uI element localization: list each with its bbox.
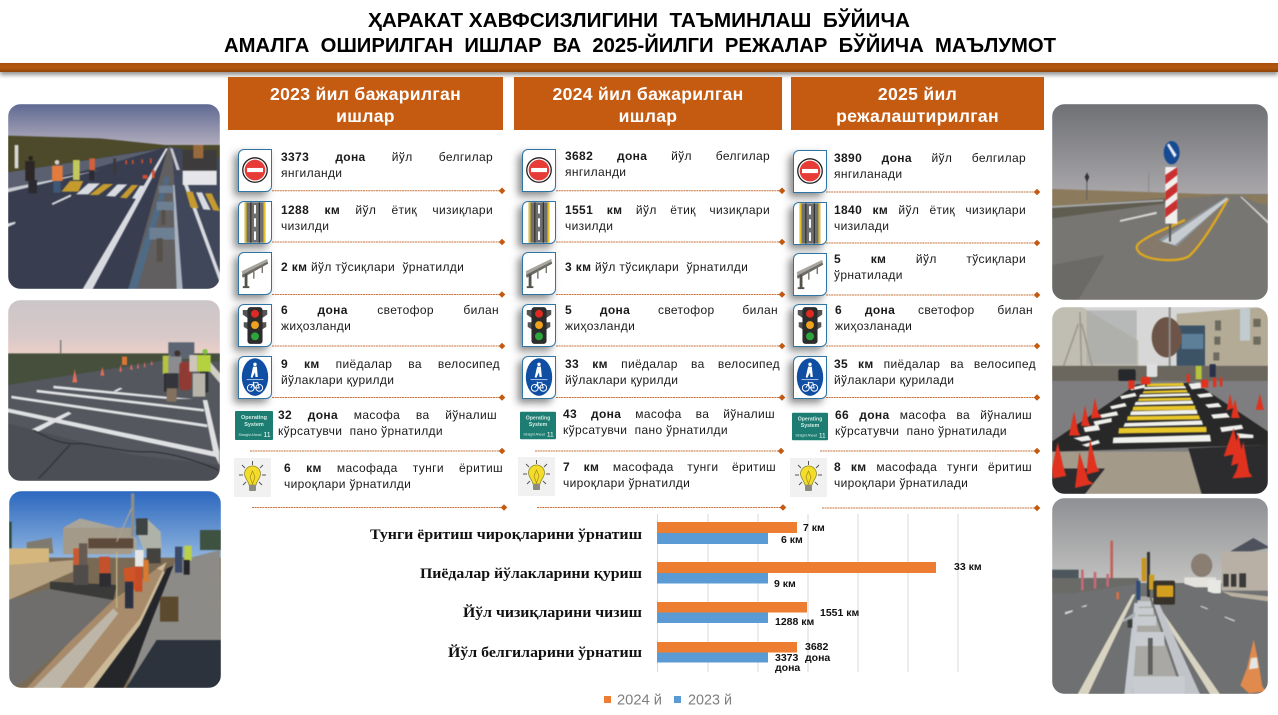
- text: lighting 2025: [834, 460, 1032, 490]
- text: paths 2023: 9 км пиёдалар ва велосипед: [281, 357, 500, 371]
- bar chart: 2023 vs 2024: 33 км: [954, 561, 982, 573]
- icon: pedestrian sign 2023: [238, 356, 272, 399]
- icon: direction board 2025: Operating: [798, 416, 822, 422]
- text: boards 2025: [835, 408, 1032, 438]
- icon: lamp 2025: [790, 458, 827, 497]
- text: traffic lights 2024: 5 дона светофор билан: [565, 303, 778, 317]
- photo: median barrier and sign: [1052, 104, 1268, 300]
- icon: guardrail 2024: [522, 252, 556, 295]
- text: lines 2024: чизилди: [565, 218, 613, 232]
- bar chart: 2023 vs 2024: дона: [775, 662, 800, 674]
- icon: direction board 2025: System: [801, 423, 820, 429]
- icon: direction board 2023: 11: [263, 432, 271, 439]
- icon: road lines 2023: [238, 201, 272, 244]
- text: lines 2023: 1288 км йўл ётиқ чизиқлари: [281, 203, 493, 217]
- text: boards 2023: [278, 408, 497, 438]
- heading: 2024: ишлар: [619, 106, 677, 126]
- chart legend: 2024 й: [617, 692, 662, 708]
- text: lighting 2023: чироқлари ўрнатилди: [284, 476, 411, 490]
- heading: 2025: режалаштирилган: [836, 106, 999, 126]
- text: lines 2024: [565, 203, 770, 232]
- text: barriers 2023: 2 км йўл тўсиқлари ўрнатилди: [281, 260, 464, 274]
- icon: direction board 2024: 11: [547, 431, 554, 438]
- text: signs 2023: [281, 150, 493, 180]
- bar chart: 2023 vs 2024: Йўл чизиқларини чизиш: [463, 604, 642, 621]
- icon: road lines 2025: [793, 202, 827, 245]
- icon: traffic light 2024: [522, 304, 556, 347]
- icon: no entry sign 2024: [522, 149, 556, 192]
- text: signs 2023: 3373 дона йўл белгилар: [281, 150, 493, 164]
- chart legend: 2023 й: [688, 692, 732, 708]
- icon: no entry sign 2023: [238, 149, 272, 192]
- text: paths 2025: 35 км пиёдалар ва велосипед: [834, 357, 1036, 371]
- text: barriers 2025: [834, 252, 1026, 282]
- text: boards 2025: кўрсатувчи пано ўрнатилади: [835, 424, 1007, 438]
- title: [224, 8, 1056, 57]
- text: paths 2025: [834, 357, 1036, 386]
- text: lighting 2023: 6 км масофада тунги ёритиш: [284, 461, 503, 475]
- text: traffic lights 2023: [281, 303, 499, 332]
- text: lighting 2023: [284, 461, 503, 490]
- text: traffic lights 2025: 6 дона светофор билан: [835, 303, 1033, 317]
- heading: 2023: [228, 77, 503, 130]
- text: paths 2024: 33 км пиёдалар ва велосипед: [565, 357, 780, 371]
- heading: 2025: 2025 йил: [878, 84, 957, 104]
- text: signs 2025: янгиланади: [834, 166, 902, 180]
- icon: direction board 2023: Straight Ahead: [239, 433, 262, 437]
- icon: direction board 2025: 11: [819, 432, 826, 439]
- text: traffic lights 2024: жиҳозланди: [565, 318, 635, 332]
- text: lines 2024: 1551 км йўл ётиқ чизиқлари: [565, 203, 770, 217]
- text: traffic lights 2023: жиҳозланди: [281, 318, 351, 332]
- text: traffic lights 2023: 6 дона светофор билан: [281, 303, 499, 317]
- text: lighting 2025: чироқлари ўрнатилади: [834, 476, 968, 490]
- photo: concrete works: [9, 491, 221, 688]
- text: paths 2023: [281, 357, 500, 386]
- icon: traffic light 2023: [238, 304, 272, 347]
- bar chart: 2023 vs 2024: 3373: [775, 652, 799, 664]
- icon: no entry sign 2025: [793, 150, 827, 193]
- text: boards 2023: 32 дона масофа ва йўналиш: [278, 408, 497, 422]
- heading: 2024: [514, 77, 782, 130]
- title: ҲАРАКАТ ХАВФСИЗЛИГИНИ ТАЪМИНЛАШ БЎЙИЧА: [368, 8, 910, 32]
- text: signs 2024: 3682 дона йўл белгилар: [565, 149, 770, 163]
- icon: direction board 2024: [520, 412, 556, 440]
- icon: direction board 2023: System: [244, 422, 264, 428]
- bar chart: 2023 vs 2024: 6 км: [781, 534, 803, 546]
- icon: pedestrian sign 2024: [522, 356, 556, 399]
- icon: pedestrian sign 2025: [793, 356, 827, 399]
- icon: road lines 2024: [522, 201, 556, 244]
- text: signs 2024: янгиланди: [565, 164, 626, 178]
- text: signs 2025: [834, 151, 1026, 180]
- bar chart: 2023 vs 2024: [370, 514, 982, 708]
- photo: road marking crew at dusk: [8, 104, 220, 289]
- text: signs 2025: 3890 дона йўл белгилар: [834, 151, 1026, 165]
- text: boards 2023: кўрсатувчи пано ўрнатилди: [278, 424, 443, 438]
- photo: pedestrian crossing markings at sunset: [8, 300, 220, 481]
- photo: raised crossing with cones: [1052, 307, 1268, 494]
- icon: direction board 2023: Operating: [241, 415, 267, 421]
- text: barriers 2024: 3 км йўл тўсиқлари ўрнатилди: [565, 260, 748, 274]
- text: lines 2023: [281, 203, 493, 232]
- text: signs 2023: янгиланди: [281, 166, 342, 180]
- text: traffic lights 2025: жиҳозланади: [835, 318, 912, 332]
- text: boards 2025: 66 дона масофа ва йўналиш: [835, 408, 1032, 422]
- text: paths 2024: йўлаклари қурилди: [565, 372, 678, 386]
- text: boards 2024: кўрсатувчи пано ўрнатилди: [563, 422, 728, 436]
- icon: lamp 2023: [234, 458, 271, 497]
- text: barriers 2025: 5 км йўл тўсиқлари: [834, 252, 1026, 266]
- icon: direction board 2024: Operating: [526, 415, 550, 421]
- icon: direction board 2023: [235, 411, 273, 440]
- bar chart: 2023 vs 2024: 9 км: [774, 578, 796, 590]
- heading: 2025: [791, 77, 1044, 130]
- icon: direction board 2024: Straight Ahead: [523, 432, 545, 436]
- bar chart: 2023 vs 2024: Тунги ёритиш чироқларини ўрнатиш: [370, 527, 642, 543]
- bar chart: 2023 vs 2024: 1288 км: [775, 616, 815, 628]
- text: lighting 2025: 8 км масофада тунги ёритиш: [834, 460, 1032, 474]
- text: lines 2025: чизилади: [834, 218, 889, 232]
- text: traffic lights 2024: [565, 303, 778, 332]
- icon: direction board 2024: System: [529, 422, 548, 428]
- text: paths 2024: [565, 357, 780, 386]
- text: paths 2025: йўлаклари қурилади: [834, 372, 954, 386]
- bar chart: 2023 vs 2024: дона: [805, 652, 830, 664]
- icon: guardrail 2025: [793, 253, 827, 296]
- text: lighting 2024: [563, 460, 776, 490]
- title: АМАЛГА ОШИРИЛГАН ИШЛАР ВА 2025-ЙИЛГИ РЕЖАЛАР БЎЙИЧА МАЪЛУМОТ: [224, 33, 1056, 57]
- text: barriers 2025: ўрнатилади: [834, 268, 903, 282]
- chart legend: [604, 692, 732, 708]
- icon: guardrail 2023: [238, 252, 272, 295]
- header band: [0, 63, 1278, 72]
- icon: lamp 2024: [518, 457, 555, 496]
- icon: traffic light 2025: [793, 304, 827, 347]
- bar chart: 2023 vs 2024: Пиёдалар йўлакларини қуриш: [420, 566, 642, 582]
- heading: 2023: 2023 йил бажарилган: [270, 84, 461, 104]
- text: traffic lights 2025: [835, 303, 1033, 332]
- heading: 2024: 2024 йил бажарилган: [552, 84, 744, 104]
- text: boards 2024: 43 дона масофа ва йўналиш: [563, 407, 775, 421]
- bar chart: 2023 vs 2024: 7 км: [803, 522, 825, 534]
- text: lines 2025: 1840 км йўл ётиқ чизиқлари: [834, 203, 1026, 217]
- bar chart: 2023 vs 2024: Йўл белгиларини ўрнатиш: [448, 644, 642, 661]
- heading: 2023: ишлар: [336, 106, 395, 126]
- text: signs 2024: [565, 149, 770, 178]
- text: lines 2025: [834, 203, 1026, 232]
- icon: direction board 2025: [792, 412, 828, 440]
- photo: guardrail installation: [1052, 498, 1268, 694]
- text: lighting 2024: 7 км масофада тунги ёритиш: [563, 460, 776, 474]
- text: paths 2023: йўлаклари қурилди: [281, 372, 394, 386]
- bar chart: 2023 vs 2024: 3682: [805, 641, 829, 653]
- text: lines 2023: чизилди: [281, 218, 329, 232]
- icon: direction board 2025: Straight Ahead: [795, 433, 817, 437]
- text: lighting 2024: чироқлари ўрнатилди: [563, 476, 690, 490]
- bar chart: 2023 vs 2024: 1551 км: [820, 607, 860, 619]
- text: boards 2024: [563, 407, 775, 436]
